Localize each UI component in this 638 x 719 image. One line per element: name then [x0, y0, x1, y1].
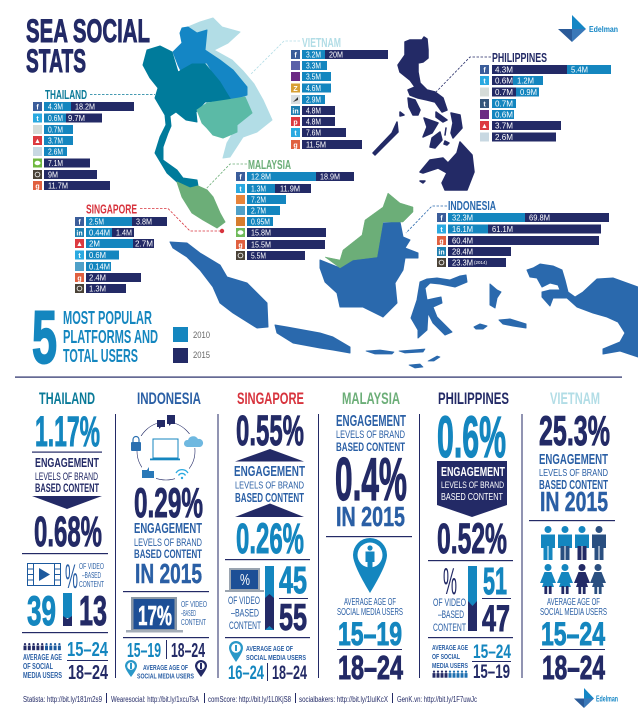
row: Google Plus [437, 236, 599, 246]
map: Cambodia [197, 97, 252, 138]
footer: sources [23, 693, 477, 704]
row: LinkedIn: in [438, 250, 445, 256]
label: engagement: IN 2015 [540, 486, 608, 517]
stat: ages [228, 663, 307, 684]
row: Google Plus: g [293, 142, 298, 150]
row: Facebook: 12.8M [251, 172, 271, 182]
heading: THAILAND [39, 389, 95, 408]
title: STATS [26, 43, 86, 79]
logo: Edelman top: Edelman [589, 24, 618, 34]
connector: Thailand [90, 94, 155, 96]
row: Google Plus: 2.4M [89, 272, 106, 282]
column: Philippines [428, 389, 513, 683]
stat: 0.4%: 0.4% [335, 446, 407, 513]
label: engagement: BASED CONTENT [336, 440, 405, 454]
row: Twitter: 1.2M [517, 76, 534, 86]
row: Instagram: 5.5M [251, 250, 266, 260]
row: Facebook: 2.5M [89, 216, 104, 226]
connector: Malaysia [205, 164, 247, 190]
label: average age: OF SOCIAL [23, 662, 53, 671]
label: video share: OF VIDEO [181, 600, 207, 609]
row: YouTube [33, 136, 73, 146]
row: Pinterest: p [293, 120, 298, 126]
marker: Singapore dot [220, 229, 224, 233]
row: Facebook: f [294, 52, 297, 60]
row: Mixi [480, 87, 539, 97]
row: Twitter: 0.6M [89, 250, 106, 260]
label: engagement: ENGAGEMENT [134, 520, 202, 537]
label: video share: –BASED [181, 609, 196, 618]
stat: ages [67, 639, 109, 684]
row: Instagram [437, 258, 506, 268]
stat: ages [540, 616, 605, 686]
label: video share: OF VIDEO [228, 595, 260, 607]
row: Facebook: 4.3M [495, 64, 513, 74]
label: video share: % [65, 558, 78, 596]
row: Google Plus: g [77, 276, 82, 282]
row: Facebook: 18.9M [320, 172, 340, 182]
label: engagement [134, 520, 202, 589]
connector: Singapore [140, 208, 220, 231]
row: YouTube: 2M [89, 238, 100, 248]
row: Facebook [437, 212, 609, 222]
stat: 0.26%: 0.26% [236, 515, 304, 563]
map: Philippines [373, 37, 474, 190]
map: Thailand [143, 46, 231, 188]
stat: ages: 15–19 [338, 616, 402, 652]
bar: video split [468, 566, 477, 631]
label: average age [540, 597, 607, 618]
row: Twitter: 61.1M [492, 224, 513, 234]
row: LinkedIn: 4.8M [306, 106, 321, 116]
label: engagement: LEVELS OF BRAND [134, 537, 202, 549]
row: Pinterest: 4.8M [306, 116, 321, 126]
map: Halmahera [490, 284, 501, 308]
heading: INDONESIA [137, 389, 201, 408]
row: Zalo: 4.6M [306, 83, 321, 93]
row: Viber: 0.6M [495, 110, 513, 120]
stat: ages: 15–24 [473, 642, 511, 663]
icon: people [24, 643, 61, 650]
icon: pin [229, 641, 243, 662]
heading: VIETNAM [550, 389, 600, 408]
row: Search: 0.14M [89, 262, 110, 272]
row: Facebook: f [36, 104, 39, 112]
row: Forum: 0.95M [251, 216, 270, 226]
row: Facebook [291, 50, 388, 60]
panel: Singapore stats [75, 202, 167, 294]
row: Instagram: 1.3M [89, 284, 106, 294]
stat: 45 vs 55: 45 [279, 560, 307, 602]
panel: Vietnam stats [291, 35, 388, 150]
row: LinkedIn: 28.4M [452, 246, 473, 256]
map: Buru [474, 324, 487, 329]
row: Facebook: f [483, 68, 486, 74]
map: Kalimantan [320, 222, 418, 317]
icon: pin with person [353, 538, 387, 593]
row: Facebook: 3.8M [136, 216, 152, 226]
callout: 5 most popular platforms: TOTAL USERS [63, 346, 138, 366]
legend: 2010 [193, 330, 210, 340]
bar: video split [265, 566, 274, 630]
row: Twitter: 16.1M [452, 224, 473, 234]
icon: female figures [540, 564, 606, 594]
label: video share: CONTENT [79, 580, 104, 589]
footer: sources: Statista: http://bit.ly/181m2s9 [23, 695, 102, 704]
row: Facebook: 69.8M [529, 212, 550, 222]
row: Mixi: 0.7M [495, 87, 513, 97]
row: Twitter: 1.3M [251, 184, 266, 194]
row: Google Plus [75, 272, 141, 282]
row: Twitter [437, 224, 601, 234]
row: YouTube: ▲ [76, 241, 83, 248]
arrow: down [32, 496, 102, 509]
section divider [15, 376, 622, 378]
stat: 1.17%: 1.17% [35, 408, 100, 456]
map: Peninsular Malaysia [177, 182, 225, 228]
row: Facebook: f [78, 220, 81, 226]
row: Twitter [236, 184, 311, 194]
stat: ages [337, 616, 403, 686]
column: Singapore [225, 389, 310, 684]
row: Google Plus: 11.7M [48, 180, 68, 190]
heading: Singapore: SINGAPORE [86, 202, 137, 216]
row: LinkedIn: 1.4M [116, 228, 132, 238]
row: Twitter: 0.6M [495, 76, 513, 86]
panel: Indonesia stats [437, 198, 609, 268]
stat: 0.68%: 0.68% [34, 508, 102, 556]
row: Instagram: 23.3M [452, 258, 473, 268]
row: Tumblr: t [483, 102, 486, 108]
row: Twitter: t [294, 130, 297, 138]
row: Blog: 2.6M [48, 146, 63, 156]
row: Facebook [480, 64, 611, 74]
label: engagement [539, 451, 608, 517]
stat: 39 vs 13 [27, 587, 107, 634]
legend [173, 327, 210, 363]
row: Twitter: t [483, 78, 486, 86]
logo: Edelman top [558, 15, 618, 42]
panel: Malaysia stats [236, 157, 354, 260]
row: Google Plus: g [35, 184, 40, 190]
label: average age: AVERAGE AGE [23, 653, 62, 662]
stat: ages: 16–24 [228, 663, 264, 684]
icon: connected devices ring [128, 414, 204, 480]
label: average age: AVERAGE AGE OF [547, 597, 600, 608]
row: Google Plus: g [439, 238, 444, 246]
row: Facebook [236, 172, 354, 182]
icon: laptop 17% [126, 597, 183, 632]
label: engagement: LEVELS OF BRAND [235, 480, 304, 492]
heading: PHILIPPINES [438, 389, 509, 408]
label: average age: AVERAGE AGE OF [246, 644, 293, 653]
heading: SINGAPORE [237, 389, 304, 408]
legend: 2015 [193, 350, 210, 360]
label: average age: AVERAGE AGE [432, 643, 468, 652]
footer: sources: GenK.vn: http://bit.ly/1F7uwJc [397, 695, 477, 704]
footer: sources: socialbakers: http://bit.ly/1luIKcX [299, 695, 389, 704]
badge: engagement: BASED CONTENT [441, 492, 503, 503]
map: Sulawesi [411, 275, 467, 338]
row: Google Plus: 60.4M [452, 236, 473, 246]
label: engagement: ENGAGEMENT [234, 463, 305, 480]
row: Twitter: 9.7M [68, 113, 85, 123]
stat: 51 vs 47 [482, 561, 511, 639]
row: Facebook [75, 216, 167, 226]
stat: 39 vs 13: 13 [79, 587, 107, 634]
row: Google Plus [291, 140, 362, 150]
row: Facebook: 20M [329, 50, 343, 60]
label: engagement [336, 413, 406, 454]
row: Facebook: f [239, 174, 242, 182]
icon: male figures [541, 526, 606, 560]
label: average age: MEDIA USERS [23, 671, 62, 680]
label: average age [23, 653, 62, 680]
connector: Vietnam [250, 41, 300, 75]
row: Tumblr: 0.7M [495, 98, 513, 108]
footer: sources: comScore: http://bit.ly/1L0KjS8 [208, 695, 291, 704]
label: engagement [35, 455, 99, 495]
badge: engagement: LEVELS OF BRAND [441, 480, 504, 490]
row: YouTube: 3.7M [495, 120, 513, 130]
stat: 51 vs 47: 47 [482, 598, 510, 639]
heading: Thailand: THAILAND [45, 87, 87, 102]
row: YouTube: 3.7M [48, 136, 63, 146]
stat: ages: 18–24 [338, 649, 403, 686]
label: engagement: LEVELS OF BRAND [35, 471, 98, 483]
label: video share: –BASED [438, 609, 464, 621]
row: Instagram: 9M [48, 170, 58, 180]
row: LinkedIn: in [292, 108, 299, 116]
row: Twitter: t [440, 227, 443, 234]
label: engagement: IN 2015 [135, 558, 202, 589]
logo: Edelman bottom: Edelman [596, 694, 618, 704]
row: Blogger: 7.2M [251, 194, 266, 204]
row: Facebook: 3.2M [306, 50, 321, 60]
badge: engagement [437, 461, 507, 517]
row: Google Plus [236, 240, 325, 250]
heading: Malaysia: MALAYSIA [248, 157, 291, 172]
label: video share: CONTENT [181, 618, 206, 627]
label: engagement: BASED CONTENT [235, 490, 304, 505]
column: Indonesia [123, 389, 209, 680]
stat: 45 vs 55: 55 [279, 597, 307, 638]
stat: ages: 18–24 [542, 649, 605, 686]
heading: MALAYSIA [342, 389, 400, 408]
heading: Philippines: PHILIPPINES [492, 50, 547, 65]
icon: pin navy [195, 660, 207, 677]
map: Sumatra [170, 242, 268, 328]
label: average age [337, 597, 403, 618]
label: video share [181, 600, 207, 627]
row: Tumblr [480, 98, 516, 108]
label: average age: SOCIAL MEDIA USERS [337, 607, 403, 618]
icon: pin blue [125, 660, 137, 677]
map: Vietnam [188, 18, 272, 158]
label: video share: CONTENT [229, 620, 261, 632]
row: Pinterest [291, 116, 335, 126]
row: Facebook: 4.3M [48, 102, 63, 112]
stat: ages: 15–24 [67, 639, 109, 661]
row: Zalo: Z [293, 86, 298, 93]
label: average age: AVERAGE AGE OF [344, 597, 396, 608]
row: YouTube: ▲ [34, 138, 41, 145]
map: Lesser Sunda islands [366, 349, 440, 368]
heading: Indonesia: INDONESIA [448, 198, 496, 213]
logo: Edelman bottom [574, 688, 618, 708]
map: Java [275, 325, 350, 353]
row: Twitter [291, 128, 346, 138]
row: Instagram: (2014) [474, 260, 487, 265]
row: Facebook: 32.3M [452, 212, 473, 222]
row: YouTube [480, 120, 561, 130]
label: video share: OF VIDEO [433, 597, 466, 609]
row: Mixi: 0.7M [48, 124, 63, 134]
column: Vietnam [529, 389, 615, 686]
column: Thailand [22, 389, 109, 684]
stat: ages: 18–24 [68, 662, 109, 684]
stat: ages: 15–24 [541, 616, 605, 652]
stat: 0.52%: 0.52% [437, 515, 507, 563]
row: Google Plus: 11.5M [306, 140, 326, 150]
map: Seram [499, 319, 526, 328]
row: Twitter: 7.6M [306, 128, 321, 138]
row: Blog: 2.6M [495, 132, 513, 142]
label: video share: –BASED [82, 571, 101, 580]
row: Zing: 3.3M [306, 60, 321, 70]
label: engagement: ENGAGEMENT [336, 413, 406, 430]
label: video share: CONTENT [433, 622, 466, 634]
label: average age [137, 663, 194, 680]
row: Search: 2.7M [251, 206, 266, 216]
callout: 5 most popular platforms: PLATFORMS AND [63, 327, 158, 347]
icon: film [28, 564, 60, 586]
label: engagement: ENGAGEMENT [35, 455, 99, 470]
map: Southeast Asia [143, 18, 638, 368]
stat: 0.29%: 0.29% [134, 479, 203, 526]
row: YouTube: ▲ [481, 123, 488, 130]
callout: 5 most popular platforms: 5 [32, 296, 57, 379]
label: average age [246, 644, 306, 662]
stat: ages: 15–19 [127, 640, 161, 662]
callout: 5 most popular platforms: MOST POPULAR [63, 308, 152, 328]
row: Google Plus: 15.5M [251, 240, 271, 250]
arrow: up [235, 449, 304, 462]
stat: 51 vs 47: 51 [483, 561, 507, 603]
label: video share: % [443, 561, 457, 603]
row: Viber: 3.5M [306, 72, 321, 82]
label: engagement: BASED CONTENT [134, 547, 202, 561]
stat: 0.55%: 0.55% [236, 407, 304, 455]
label: video share [433, 561, 466, 634]
stat: 0.6%: 0.6% [437, 405, 506, 470]
label: average age: SOCIAL MEDIA USERS [246, 653, 306, 662]
label: average age: AVERAGE AGE OF [143, 663, 188, 672]
row: LinkedIn: in [76, 230, 83, 238]
row: Facebook: f [440, 216, 443, 222]
row: WeChat: 15.8M [251, 228, 271, 238]
row: YouTube: 2.7M [135, 238, 153, 248]
row: Twitter: t [239, 186, 242, 194]
panel: Philippines stats [480, 50, 611, 142]
row: Facebook: 18.2M [75, 102, 95, 112]
row: LinkedIn [437, 246, 511, 256]
row: Facebook: 5.4M [571, 64, 588, 74]
row: Google Plus: g [238, 242, 243, 250]
map: Malaysian Borneo [325, 193, 413, 268]
row: YouTube [75, 238, 154, 248]
connector: Philippines [436, 57, 491, 92]
row: Twitter [33, 113, 102, 123]
row: Twitter [75, 250, 119, 260]
label: average age: MEDIA USERS [432, 661, 468, 670]
label: average age [432, 643, 468, 670]
row: Facebook [33, 102, 134, 112]
connector: Indonesia [406, 206, 447, 233]
row: Twitter: t [36, 116, 39, 123]
callout: 5 most popular platforms [32, 296, 158, 379]
stat: ages: 15–19 [473, 662, 510, 683]
stat: ages: 18–24 [171, 640, 206, 662]
stat: 45 vs 55 [279, 560, 308, 638]
row: Mixi: 0.9M [520, 87, 537, 97]
map: Papua [527, 264, 638, 357]
column: Malaysia [326, 389, 412, 686]
label: in 2015: IN 2015 [336, 501, 405, 532]
row: Zalo [291, 83, 331, 93]
title: SEA SOCIAL [26, 13, 150, 49]
label: average age: SOCIAL MEDIA USERS [137, 672, 194, 680]
row: Twitter: t [78, 253, 81, 260]
label: video share: –BASED [231, 608, 259, 620]
footer: sources: Wearesocial: http://bit.ly/1xcuTsA [111, 695, 199, 704]
stat: ages [472, 642, 511, 683]
badge: engagement: ENGAGEMENT [441, 465, 505, 479]
row: Messenger: 2.9M [306, 94, 321, 104]
row: LinkedIn [75, 228, 134, 238]
label: average age: OF SOCIAL [432, 652, 460, 661]
icon: laptop: % [240, 572, 250, 589]
arrow: up [235, 504, 304, 517]
label: engagement: BASED CONTENT [35, 481, 99, 495]
label: engagement: LEVELS OF BRAND [539, 467, 608, 479]
row: Twitter [480, 76, 543, 86]
icon: laptop 17%: 17% [138, 600, 172, 631]
row: Line: 7.1M [48, 158, 63, 168]
label: engagement [234, 463, 305, 505]
title [26, 13, 150, 79]
row: Google Plus [33, 180, 110, 190]
heading: Vietnam: VIETNAM [302, 35, 341, 50]
icon: people [432, 670, 468, 678]
label: video share [228, 595, 261, 632]
label: engagement: LEVELS OF BRAND [336, 429, 405, 441]
stat: ages: 18–24 [272, 663, 307, 684]
row: LinkedIn: 0.44M [89, 228, 110, 238]
panel: Thailand stats [33, 87, 134, 190]
map: Laos [173, 27, 247, 100]
label: video share: OF VIDEO [79, 562, 104, 571]
row: Twitter: 0.6M [48, 113, 63, 123]
stat: 39 vs 13: 39 [27, 587, 56, 634]
row: Twitter: 11.9M [280, 184, 300, 194]
icon: laptop [225, 568, 264, 592]
row: LinkedIn [291, 106, 335, 116]
